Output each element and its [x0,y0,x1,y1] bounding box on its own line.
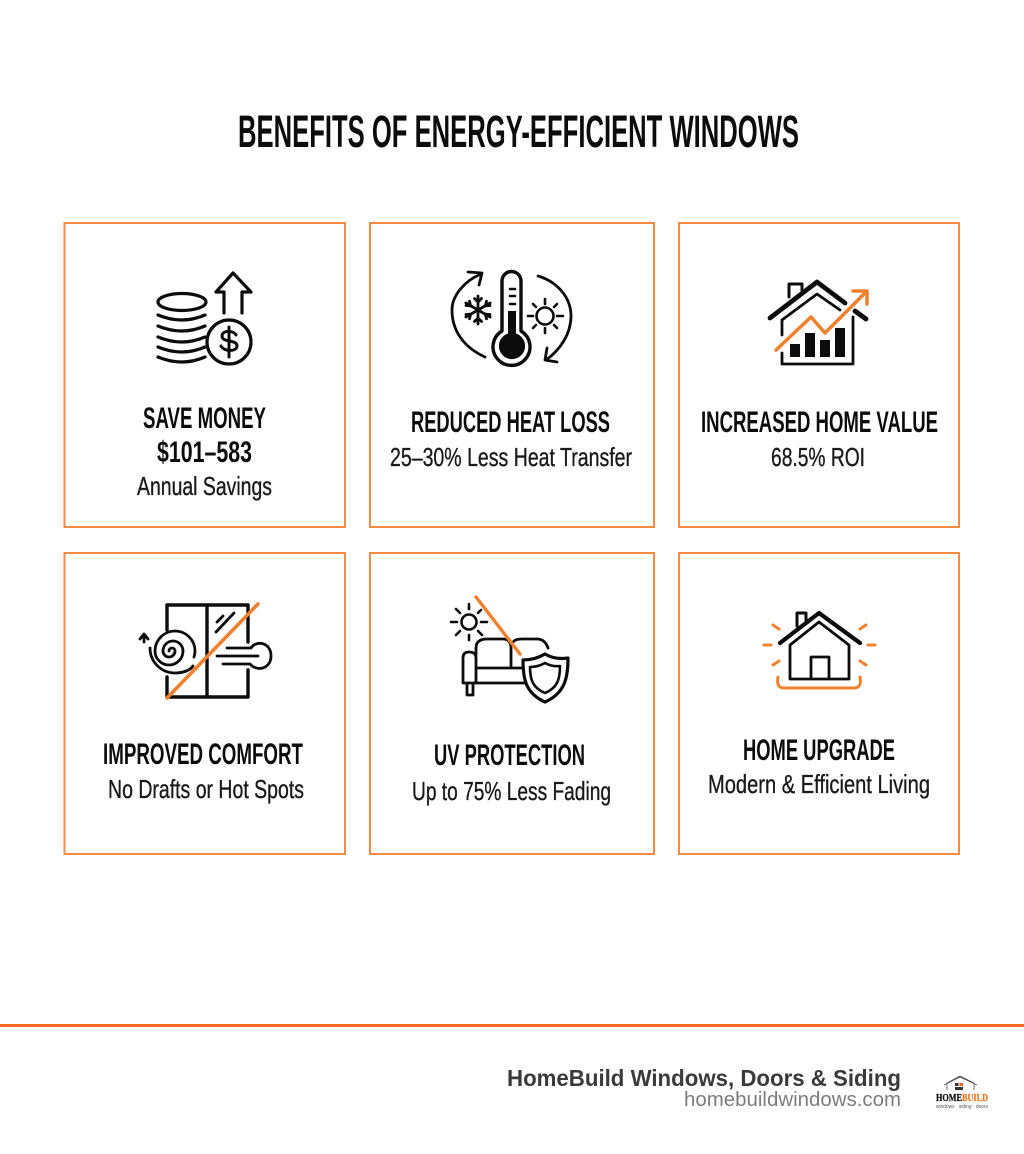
value: savings range: $101–583 [157,436,252,469]
panel: reduced heat loss [370,223,654,527]
subtext: annual savings: Annual Savings [137,471,272,501]
logo: HomeBuild: BUILD [962,1092,988,1104]
heading: home upgrade: HOME UPGRADE [743,734,895,767]
heading: reduced heat loss: REDUCED HEAT LOSS [411,406,610,439]
footer: company name: HomeBuild Windows, Doors & Siding [507,1065,901,1091]
logo: HomeBuild [936,1076,988,1110]
subtext: modern living: Modern & Efficient Living [708,769,930,799]
footer: website: homebuildwindows.com [684,1089,901,1111]
icon: coins and dollar with up arrow [158,273,251,364]
subtext: heat transfer: 25–30% Less Heat Transfer [390,442,632,472]
heading: save money: SAVE MONEY [143,402,266,435]
icon: window with draft swirl and wind [140,604,271,698]
logo: HomeBuild: windows · siding · doors [936,1104,988,1110]
panel: save money [64,223,345,527]
panel: improved comfort [64,553,345,854]
subtext: drafts: No Drafts or Hot Spots [108,774,304,804]
icon: thermometer with snowflake and sun [452,272,571,365]
panel: increased home value [679,223,959,527]
icon: house with growth chart [770,282,867,364]
panel: UV protection [370,553,654,854]
heading: improved comfort: IMPROVED COMFORT [103,738,303,771]
logo: HomeBuild: HOME [936,1092,962,1104]
subtext: fading: Up to 75% Less Fading [412,776,611,806]
icon: sun, sofa and shield [451,597,568,702]
heading: UV protection: UV PROTECTION [434,739,585,772]
footer rule [0,1024,1024,1027]
icon: house with glow [764,613,875,688]
subtext: ROI: 68.5% ROI [771,442,865,472]
panel: home upgrade [679,553,959,854]
